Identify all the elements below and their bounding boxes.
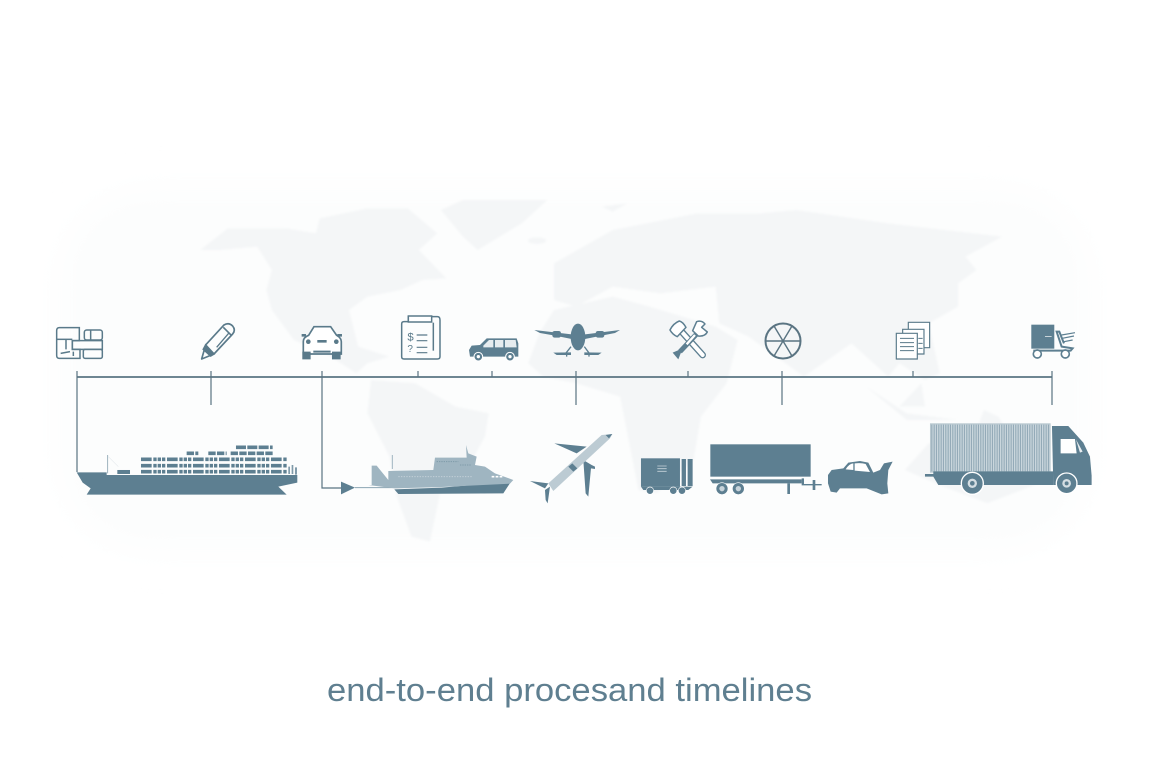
large container truck	[925, 424, 1092, 494]
cargo container	[931, 424, 1050, 472]
icon: clipboard checklist: $	[407, 332, 414, 344]
title: end-to-end procesand timelines	[327, 672, 812, 708]
icon: van	[469, 338, 518, 361]
icon: airplane front	[534, 324, 620, 357]
icon: delivery cart	[1031, 325, 1075, 358]
arrowhead and tail line	[341, 482, 395, 494]
container ship	[77, 447, 297, 495]
icon: clipboard checklist: ?	[407, 344, 413, 355]
small box trailer	[641, 458, 693, 494]
long trailer	[710, 444, 822, 495]
car with open hood	[828, 461, 893, 494]
hull	[77, 472, 297, 495]
chassis	[925, 471, 1053, 485]
world map background	[200, 200, 1039, 542]
icon: documents	[896, 322, 930, 359]
icon: spoked wheel	[766, 324, 800, 358]
ferry ship	[368, 445, 513, 494]
timeline axis	[77, 371, 1052, 488]
icon: crossed tools	[670, 321, 707, 359]
containers	[141, 459, 287, 472]
cab	[1052, 426, 1092, 485]
icon: clipboard checklist	[402, 316, 440, 359]
icon: car front	[302, 327, 342, 359]
airplane in flight	[530, 434, 612, 503]
icon: pencil	[202, 324, 234, 359]
icon: floor-plan tiles	[57, 328, 102, 358]
